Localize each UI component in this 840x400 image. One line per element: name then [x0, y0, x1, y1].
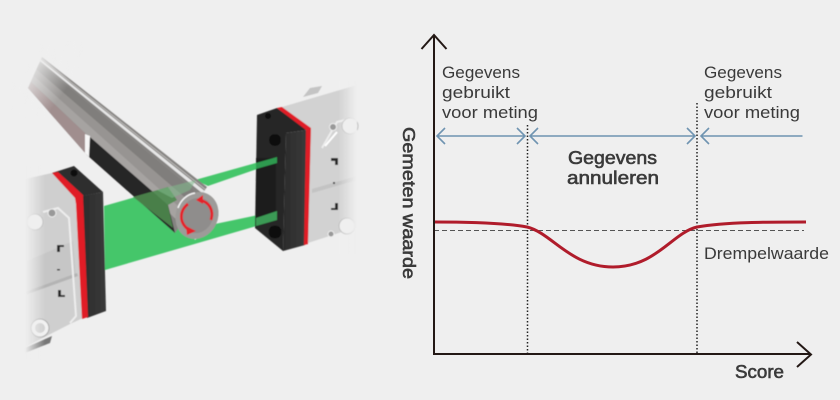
dotted boundary lines: [528, 103, 697, 354]
illustration: sensors and rod: [10, 40, 358, 360]
label: left data used: voor meting: [442, 103, 538, 122]
y axis title: Gemeten waarde: [399, 127, 419, 279]
red measured curve: [434, 222, 806, 267]
label: right data used: Gegevens: [704, 63, 782, 82]
x axis title: Score: [735, 362, 784, 382]
green light beam: [104, 157, 277, 270]
label: right data used: [704, 63, 800, 122]
label: left data used: [442, 63, 538, 122]
label: left data used: Gegevens: [442, 63, 520, 82]
label: cancel data: annuleren: [567, 168, 659, 188]
threshold dashed line: [434, 230, 804, 232]
range arrows: [437, 128, 802, 144]
label: cancel data: Gegevens: [568, 148, 657, 168]
axes: [422, 35, 811, 367]
rod: [10, 40, 207, 233]
label: threshold: Drempelwaarde: [704, 245, 829, 263]
rod end face with rotation arrows: [168, 185, 226, 246]
left sensor: [25, 165, 106, 360]
label: left data used: gebruikt: [442, 83, 510, 102]
right sensor: [255, 80, 358, 255]
label: right data used: gebruikt: [704, 83, 772, 102]
label: cancel data: [567, 148, 659, 188]
chart: measured value against score: [399, 35, 829, 382]
label: right data used: voor meting: [704, 103, 800, 122]
